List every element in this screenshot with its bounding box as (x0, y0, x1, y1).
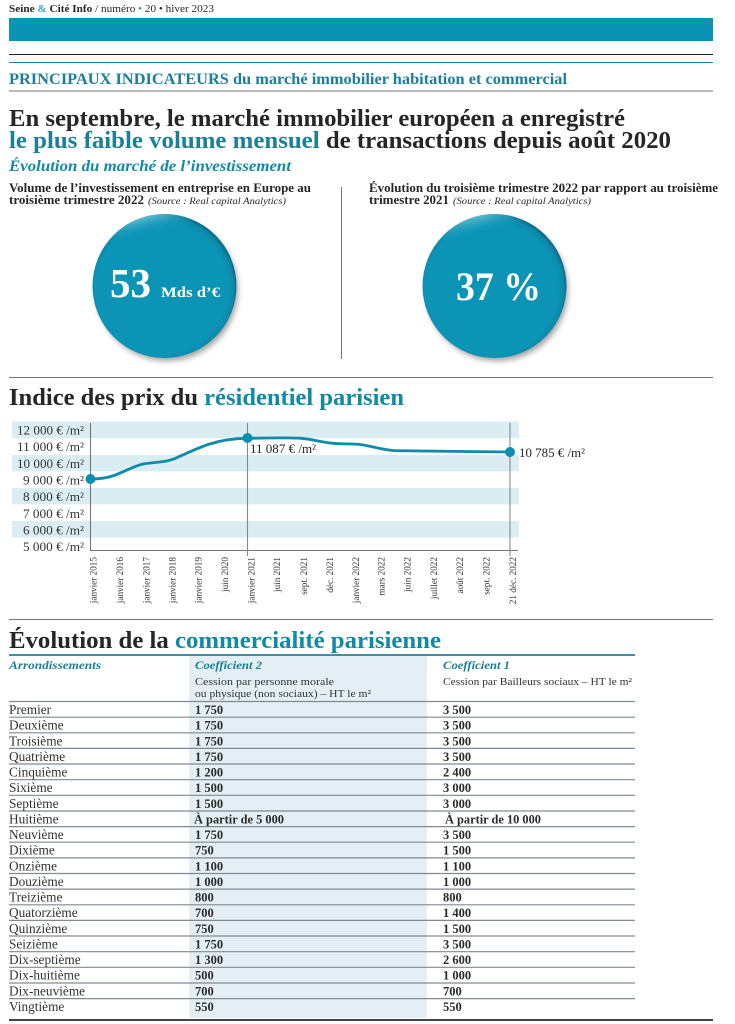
table rows: 1 500 (195, 781, 223, 795)
value callout: December 2022: 10 785 € /m² (519, 446, 585, 460)
table rows: 1 750 (195, 734, 223, 748)
heading: price index: Indice des prix du résidentiel parisien (9, 384, 404, 411)
line chart: Paris residential price index (12, 422, 585, 604)
x axis labels: août 2022 (455, 557, 465, 594)
x axis labels: juillet 2022 (429, 557, 439, 600)
table rows: 3 500 (443, 828, 471, 842)
table rows: Neuvième (9, 827, 64, 842)
table rows: 3 500 (443, 938, 471, 952)
table rows: Treizième (9, 890, 63, 905)
table rows: 1 750 (195, 938, 223, 952)
volume description (9, 181, 311, 207)
table rows: Sixième (9, 780, 53, 795)
table rows: Troisième (9, 733, 63, 748)
stat circle: 53 Mds d'€ (92, 214, 238, 361)
y axis labels: 10 000 € /m² (17, 457, 84, 471)
table rows: Premier (9, 702, 52, 717)
x axis labels: janvier 2016 (115, 557, 125, 604)
table rows: Quinzième (9, 921, 67, 936)
table rows: Seizième (9, 936, 58, 952)
main headline: le plus faible volume mensuel de transactions depuis août 2020 (9, 127, 671, 154)
panel: quarterly change (369, 181, 718, 361)
y axis labels: 6 000 € /m² (23, 524, 84, 538)
table rows: Dix-septième (9, 952, 81, 967)
x axis labels: sept. 2022 (482, 557, 492, 595)
table header: Cession par personne morale (195, 676, 334, 688)
table rows: 3 000 (443, 797, 471, 811)
volume description: (Source : Real capital Analytics) (148, 196, 286, 207)
volume description: troisième trimestre 2022 (9, 193, 144, 207)
x axis labels: janvier 2015 (88, 557, 98, 604)
change description: Évolution du troisième trimestre 2022 par rapport au troisième (369, 181, 718, 195)
table rows: 1 200 (195, 766, 223, 780)
table header: Cession par Bailleurs sociaux – HT le m² (443, 676, 633, 688)
table rows: 800 (195, 891, 214, 905)
table rows: À partir de 10 000 (445, 812, 541, 826)
table rows: 550 (195, 1000, 214, 1014)
stat circle: 37 % (422, 214, 568, 361)
table rows: 750 (195, 922, 214, 936)
table rows: Dix-neuvième (9, 983, 85, 998)
table header: ou physique (non sociaux) – HT le m² (195, 688, 372, 700)
table rows: 700 (195, 906, 214, 920)
x axis labels: juin 2022 (402, 557, 412, 593)
main headline (9, 105, 671, 154)
table rows: 2 400 (443, 766, 471, 780)
table rows: 2 600 (443, 953, 471, 967)
table rows: 1 100 (195, 859, 223, 873)
table rows: 1 500 (443, 844, 471, 858)
table rows: 1 750 (195, 750, 223, 764)
table rows: 550 (443, 1000, 462, 1014)
change description: (Source : Real capital Analytics) (453, 196, 591, 207)
subheading: Évolution du marché de l’investissement (8, 156, 292, 175)
y axis labels (17, 424, 84, 554)
table header (8, 658, 633, 700)
table rows (9, 702, 541, 1014)
y axis labels: 8 000 € /m² (23, 490, 84, 504)
table rows: 1 750 (195, 719, 223, 733)
x axis labels: janvier 2022 (351, 557, 361, 604)
x axis labels: janvier 2021 (246, 557, 256, 604)
x axis labels: janvier 2019 (194, 557, 204, 604)
change description (369, 181, 718, 207)
table rows: Quatrième (9, 749, 65, 764)
table rows: 3 500 (443, 719, 471, 733)
table rows: Dix-huitième (9, 968, 80, 983)
table rows: 3 500 (443, 750, 471, 764)
table rows: 3 500 (443, 734, 471, 748)
table rows: 1 750 (195, 828, 223, 842)
table rows: 500 (195, 969, 214, 983)
table header: Arrondissements (8, 658, 101, 672)
x axis labels: mars 2022 (376, 557, 386, 596)
table rows: 700 (195, 984, 214, 998)
table rows: 800 (443, 891, 462, 905)
section title: PRINCIPAUX INDICATEURS du marché immobilier habitation et commercial (9, 71, 568, 88)
x axis labels: déc. 2021 (325, 557, 335, 593)
table rows: Onzième (9, 858, 57, 873)
x axis labels: 21 déc. 2022 (508, 557, 518, 604)
change description: trimestre 2021 (369, 193, 449, 207)
table rows: 1 400 (443, 906, 471, 920)
table rows: 1 300 (195, 953, 223, 967)
x axis labels: janvier 2017 (142, 557, 152, 604)
stat circle: 37 %: 37 % (456, 264, 541, 309)
heading: commercial evolution: Évolution de la commercialité parisienne (9, 626, 441, 654)
x axis labels: juin 2020 (220, 557, 230, 593)
table rows: Douzième (9, 874, 64, 889)
value callout: January 2021: 11 087 € /m² (250, 442, 316, 456)
table rows: Vingtième (9, 999, 64, 1014)
y axis labels: 9 000 € /m² (23, 474, 84, 488)
table rows: 3 000 (443, 781, 471, 795)
table rows: Quatorzième (9, 905, 78, 920)
panel: investment volume (9, 181, 311, 361)
table rows: 1 500 (443, 922, 471, 936)
y axis labels: 7 000 € /m² (23, 507, 84, 521)
table rows: 1 000 (443, 875, 471, 889)
x axis labels: juin 2021 (272, 557, 282, 593)
teal banner (9, 18, 713, 41)
main headline: En septembre, le marché immobilier européen a enregistré (9, 105, 625, 132)
x axis labels: sept. 2021 (299, 557, 309, 595)
table: commercial coefficients by arrondissement (8, 654, 713, 1021)
data points (86, 433, 515, 484)
header line: Seine & Cité Info / numéro • 20 • hiver 2023 (9, 4, 214, 15)
table rows: 1 100 (443, 859, 471, 873)
table rows: 3 500 (443, 703, 471, 717)
y axis labels: 5 000 € /m² (23, 540, 84, 554)
x axis labels: janvier 2018 (168, 557, 178, 604)
table rows: Septième (9, 796, 59, 811)
table rows: 1 500 (195, 797, 223, 811)
price curve (90, 438, 510, 479)
table rows: À partir de 5 000 (194, 812, 284, 826)
x axis labels (88, 557, 518, 604)
table rows: Deuxième (9, 718, 64, 733)
y axis labels: 12 000 € /m² (17, 424, 84, 438)
table rows: 750 (195, 844, 214, 858)
table rows: 700 (443, 984, 462, 998)
table header: Coefficient 1 (443, 658, 510, 672)
table header: Coefficient 2 (195, 658, 262, 672)
table rows: Cinquième (9, 764, 67, 780)
stat circle: 53 Mds d'€: 53 (110, 260, 151, 306)
table rows: Huitième (9, 811, 59, 826)
table rows: 1 000 (443, 969, 471, 983)
stat circle: 53 Mds d'€: Mds d’€ (161, 285, 221, 301)
y axis labels: 11 000 € /m² (17, 440, 84, 454)
table rows: 1 000 (195, 875, 223, 889)
volume description: Volume de l’investissement en entreprise en Europe au (9, 181, 311, 195)
table rows: Dixième (9, 843, 55, 858)
table rows: 1 750 (195, 703, 223, 717)
